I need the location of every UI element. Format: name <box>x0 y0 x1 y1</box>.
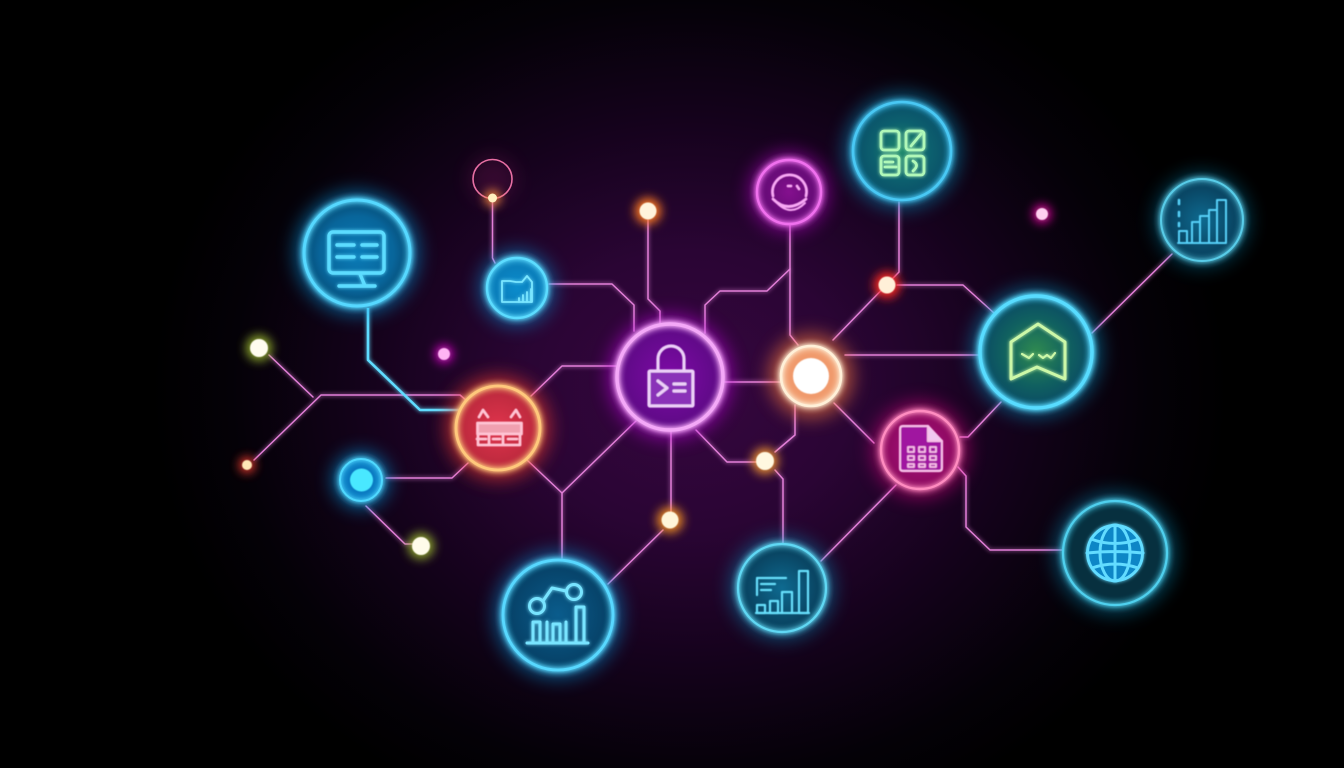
node: globe <box>1054 492 1176 614</box>
node: line and bar chart <box>494 551 622 679</box>
icon: padlock terminal <box>649 346 693 406</box>
dot: yellow far left <box>246 335 272 361</box>
node: orange hub <box>769 334 853 418</box>
icon: cat keyboard <box>477 410 522 445</box>
icon: rising bars <box>1178 200 1226 243</box>
dot: magenta left <box>435 345 453 363</box>
connector lines <box>254 198 1172 584</box>
node: cyan small dot <box>333 452 389 508</box>
icon: face <box>772 175 807 210</box>
node: report bars <box>730 536 834 640</box>
icon: globe <box>1087 525 1143 581</box>
dot: orange red <box>874 272 900 298</box>
node: house <box>971 287 1101 417</box>
icon: app grid <box>881 131 924 175</box>
node: spreadsheet file <box>872 402 968 498</box>
icon: spreadsheet file <box>900 426 942 471</box>
node: far right bar chart <box>1154 172 1250 268</box>
dot: magenta right <box>1033 205 1051 223</box>
icon: monitor <box>329 232 384 286</box>
thick cyan connector <box>368 308 462 410</box>
dot: small orange far left <box>239 457 255 473</box>
dot: orange center right <box>752 448 778 474</box>
icon: line and bar chart <box>527 584 588 643</box>
icon: report bars <box>756 571 809 613</box>
dot: orange top <box>635 198 661 224</box>
dot: orange lower center <box>657 507 683 533</box>
node: small folder chart <box>479 250 555 326</box>
icon: house outline <box>1011 324 1065 379</box>
node: smiley <box>749 152 829 232</box>
node: app grid <box>844 93 960 209</box>
node: hollow circle with dot <box>468 155 516 206</box>
node: lock <box>608 315 732 439</box>
dot: yellow lower left <box>408 533 434 559</box>
node: red cat keyboard <box>446 376 550 480</box>
icon: folder chart <box>502 276 532 302</box>
node: monitor <box>295 191 419 315</box>
